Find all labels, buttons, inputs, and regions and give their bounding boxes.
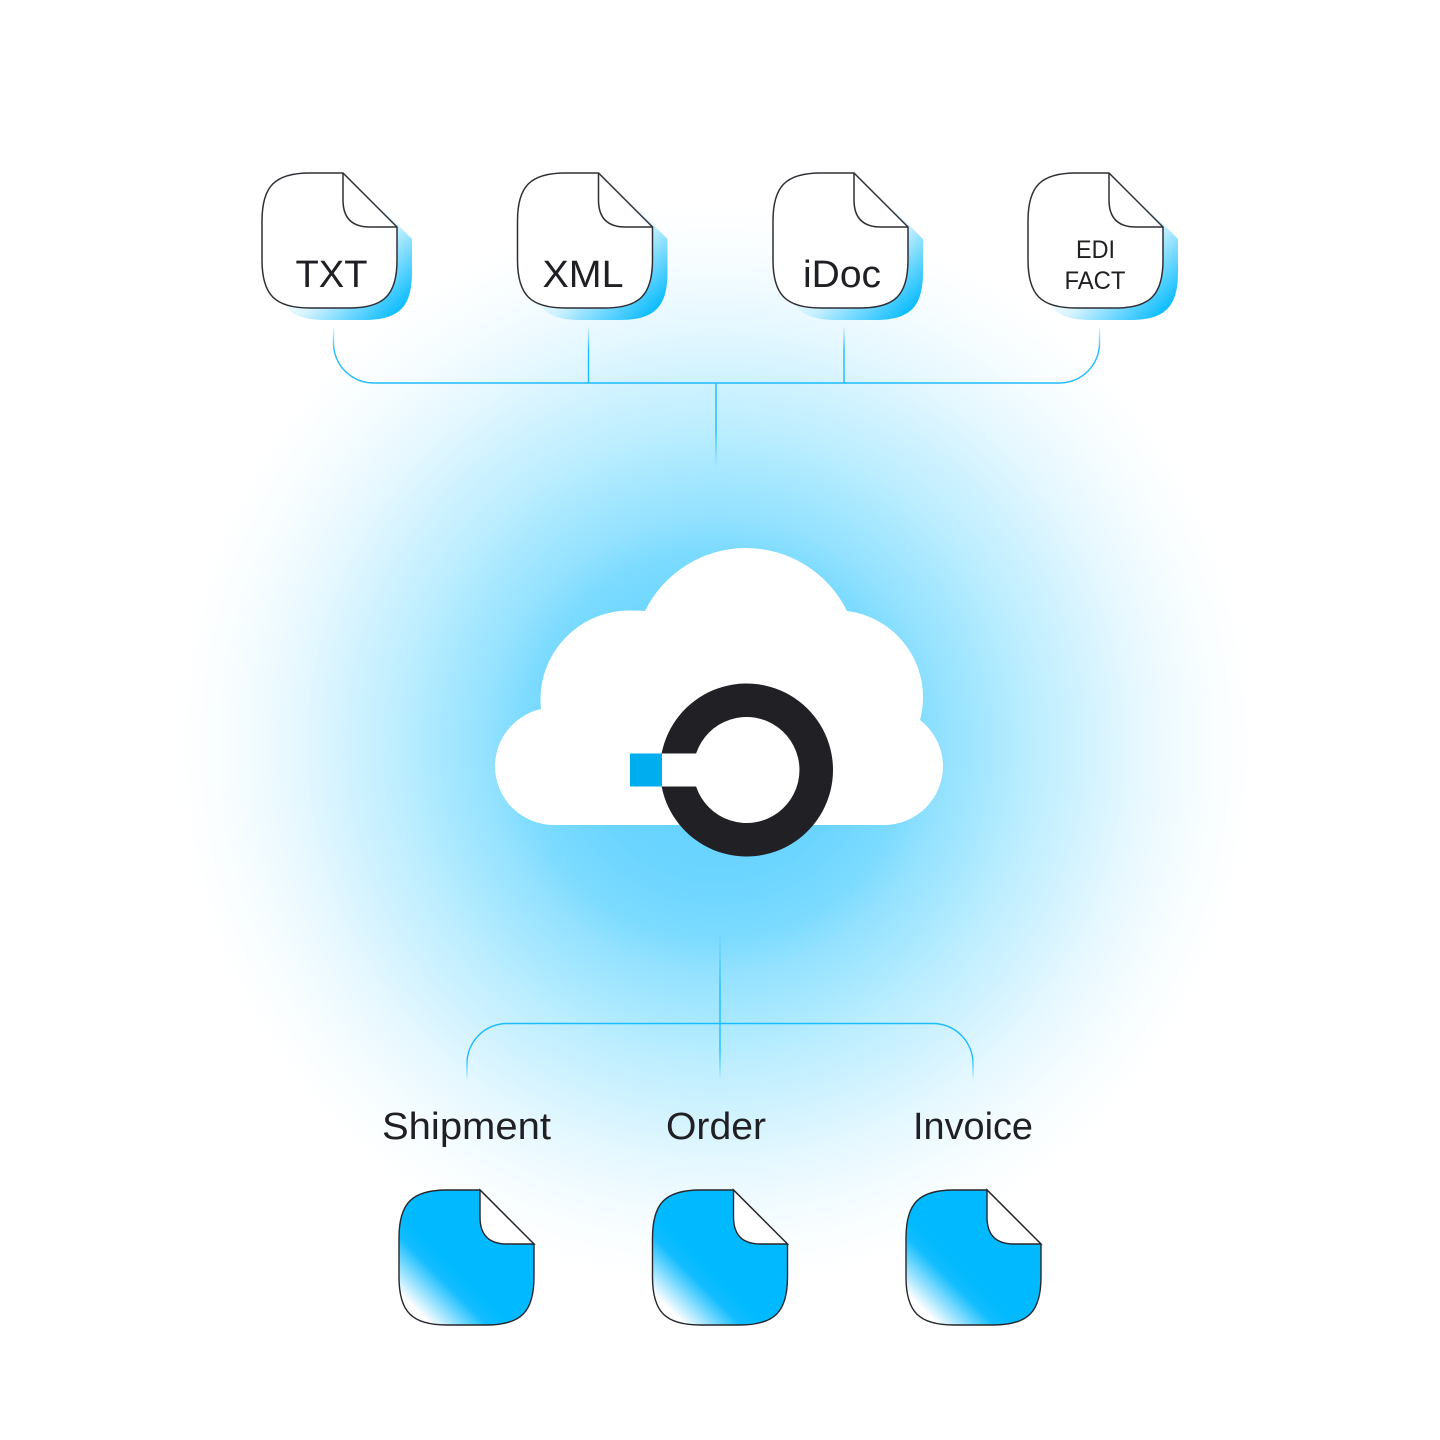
connector: bottom bracket (467, 930, 973, 1082)
file icon: XML: XML (542, 254, 624, 296)
file icon: Order output (652, 1190, 788, 1325)
label: Order: Order (666, 1106, 766, 1148)
file icon: Shipment output (399, 1190, 534, 1325)
file icon: iDoc (773, 173, 923, 320)
file icon: EDI FACT: EDI (1076, 236, 1115, 264)
file icon: iDoc: iDoc (803, 254, 881, 296)
logo: ring with blue square (630, 683, 833, 856)
cloud (495, 548, 943, 825)
file icon: EDI FACT (1028, 173, 1178, 320)
label: Shipment: Shipment (382, 1106, 551, 1148)
file icon: XML (518, 173, 668, 320)
file icon: EDI FACT: FACT (1064, 267, 1126, 295)
file icon: TXT: TXT (296, 254, 368, 296)
file icon: TXT (262, 173, 412, 320)
connector: top bracket (334, 328, 1100, 468)
label: Invoice: Invoice (913, 1106, 1033, 1148)
file icon: Invoice output (906, 1190, 1041, 1325)
